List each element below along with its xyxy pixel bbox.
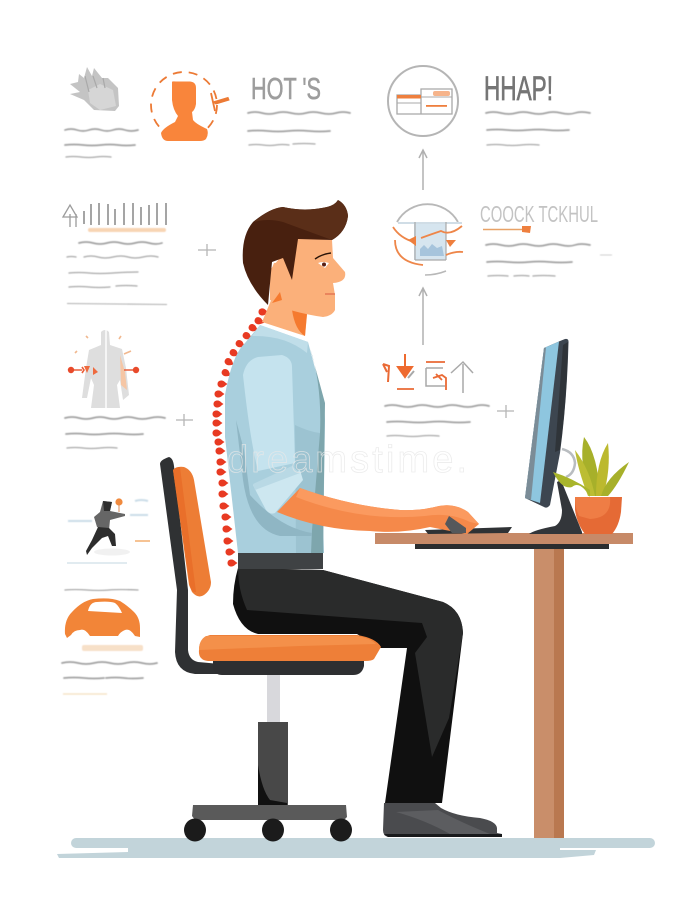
face — [270, 238, 345, 317]
arrow: upward middle — [419, 288, 427, 345]
arrow: upward top — [419, 150, 427, 190]
text lines: chart block — [67, 242, 167, 304]
text lines: car block — [62, 662, 157, 694]
shirt — [225, 325, 325, 553]
floor — [57, 838, 655, 858]
orange highlight — [88, 228, 166, 232]
icon: bar chart with arrow — [63, 203, 166, 227]
text lines: technical block — [486, 244, 612, 276]
arrow: orange — [483, 226, 531, 233]
icon: plus — [176, 414, 193, 426]
monitor body — [525, 339, 569, 508]
icon: runner — [67, 498, 150, 563]
ear — [272, 263, 286, 288]
hair shadow — [272, 292, 282, 303]
neck — [262, 298, 308, 336]
text lines: body block — [65, 417, 165, 448]
chair gas cylinder — [258, 722, 288, 806]
heading: COOCK TCKHUL: COOCK TCKHUL — [480, 201, 598, 227]
icon: small pointer — [211, 93, 229, 111]
mouse — [445, 516, 466, 533]
heading: HOT 'S: HOT 'S — [251, 71, 321, 106]
chair base — [192, 805, 347, 820]
text lines: HOT block — [248, 112, 350, 146]
panel: head profile icon — [151, 72, 229, 141]
monitor — [525, 339, 582, 534]
chair pole — [267, 674, 280, 723]
desk leg — [534, 548, 564, 838]
trousers — [233, 568, 463, 803]
icon: body with arrows — [68, 330, 139, 408]
icon: dashed circle — [151, 72, 217, 138]
icon: orange car — [65, 598, 140, 638]
neck shadow — [292, 310, 307, 336]
icon: circular window chart — [393, 204, 463, 275]
belt — [238, 553, 323, 569]
desk top — [375, 533, 633, 544]
monitor screen — [525, 342, 559, 503]
leaves — [582, 437, 600, 496]
spine markers — [212, 308, 269, 567]
plant — [553, 437, 629, 534]
sleeve — [243, 355, 303, 514]
mouth — [325, 293, 335, 295]
eye and brow — [315, 253, 331, 268]
seat cushion — [199, 635, 381, 661]
text line above car — [65, 590, 138, 591]
person — [212, 200, 502, 837]
chair — [160, 457, 364, 842]
text lines: arrows block — [385, 405, 489, 436]
chair seat support — [213, 661, 364, 675]
shoe — [383, 803, 502, 837]
back cushion — [173, 467, 211, 596]
icon: plus — [198, 244, 216, 256]
keyboard — [425, 527, 512, 534]
icon: orange bust — [161, 81, 208, 141]
icon: plus — [497, 405, 514, 418]
chair back frame — [160, 457, 220, 674]
text lines — [65, 129, 138, 158]
pot — [575, 497, 622, 534]
icon: small arrows row — [383, 354, 473, 393]
monitor arm — [562, 449, 575, 477]
orange smear — [82, 645, 143, 651]
icon: grey hand — [70, 67, 119, 111]
desk support — [415, 544, 609, 549]
arm — [277, 488, 479, 534]
watermark: dreamstime. — [227, 439, 467, 481]
panel: hand icon and notes — [65, 67, 138, 158]
text lines: HHAP block — [486, 112, 590, 146]
monitor stand — [529, 480, 582, 534]
hair — [243, 200, 348, 305]
icon: circle with boxes — [388, 66, 458, 136]
desk — [375, 533, 633, 838]
chair wheels — [184, 818, 352, 842]
heading: HHAP!: HHAP! — [484, 70, 553, 108]
